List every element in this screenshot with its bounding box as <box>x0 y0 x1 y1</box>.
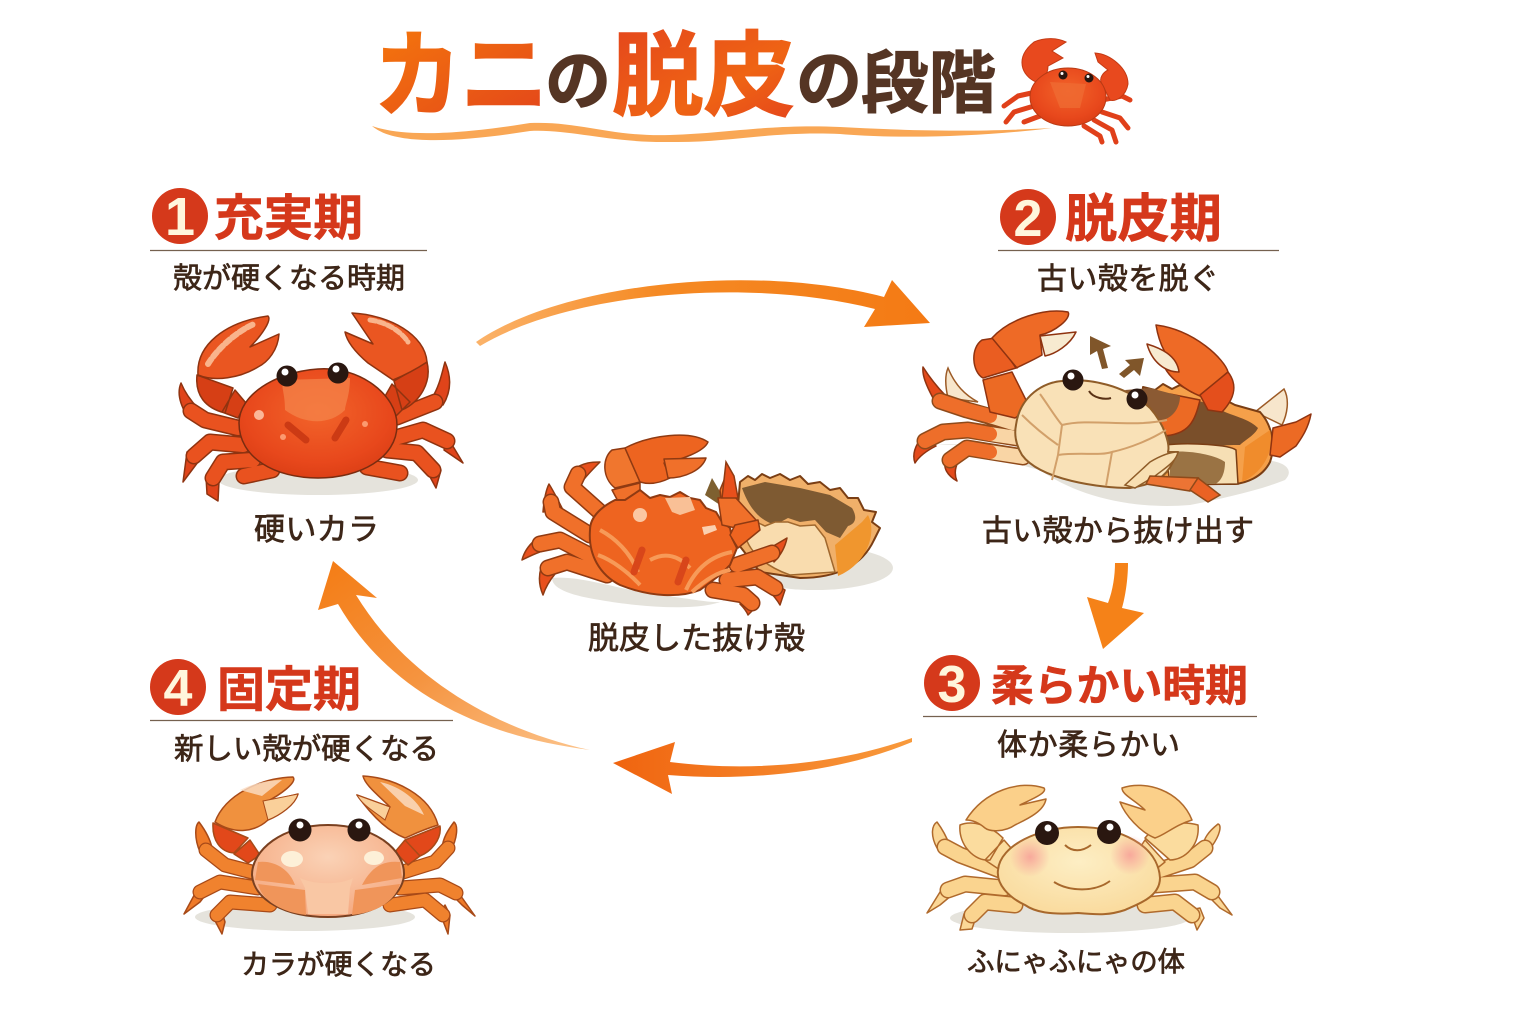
heading: stage 4: 固定期 <box>217 664 361 717</box>
heading: stage 3: 柔らかい時期 <box>991 663 1248 711</box>
heading: stage 1: 充実期 <box>214 192 363 246</box>
crab: hard shell <box>179 313 463 501</box>
heading: stage 4 <box>150 659 453 720</box>
panel: stage 4 <box>150 659 475 980</box>
icon: up arrows <box>1090 336 1144 378</box>
caption: center: 脱皮した抜け殻 <box>588 621 805 656</box>
arrow: stage 1 to 2 <box>476 280 930 346</box>
arrow: stage 3 to 4 <box>613 738 912 794</box>
crab: emerging from old shell <box>914 311 1311 506</box>
icon: title crab <box>1004 39 1130 142</box>
title <box>374 23 996 128</box>
heading: stage 1 <box>150 187 427 250</box>
title: 段階 <box>861 46 996 122</box>
subheading: stage 4: 新しい殻が硬くなる <box>174 733 439 766</box>
crab: shell hardening <box>184 776 475 934</box>
arrow: stage 4 to 1 <box>318 561 590 750</box>
title: の <box>796 44 862 118</box>
title: 脱皮 <box>612 26 795 128</box>
heading: stage 1: 1 <box>165 187 195 247</box>
heading: stage 2: 2 <box>1014 190 1042 248</box>
caption: stage 3: ふにゃふにゃの体 <box>967 946 1185 977</box>
panel: stage 3 <box>923 655 1257 977</box>
panel: shed shell in center <box>522 435 893 656</box>
subheading: stage 3: 体か柔らかい <box>997 729 1180 762</box>
caption: stage 1: 硬いカラ <box>254 512 379 547</box>
title: の <box>545 44 611 118</box>
panel: stage 1 <box>150 187 463 547</box>
title underline wave <box>372 123 1052 142</box>
panel: stage 2 <box>914 189 1311 548</box>
caption: stage 2: 古い殻から抜け出す <box>982 515 1254 548</box>
crab: soft pale body <box>927 785 1232 933</box>
crab and cast-off shell <box>522 435 893 615</box>
heading: stage 2: 脱皮期 <box>1065 191 1222 249</box>
heading: stage 3: 3 <box>938 656 966 714</box>
heading: stage 4: 4 <box>164 660 193 718</box>
title: カニ <box>374 23 548 128</box>
caption: stage 4: カラが硬くなる <box>241 949 436 980</box>
arrow: stage 2 to 3 <box>1087 563 1144 649</box>
heading: stage 2 <box>998 189 1279 250</box>
subheading: stage 2: 古い殻を脱ぐ <box>1037 263 1219 296</box>
heading: stage 3 <box>923 655 1257 716</box>
subheading: stage 1: 殻が硬くなる時期 <box>173 262 405 295</box>
